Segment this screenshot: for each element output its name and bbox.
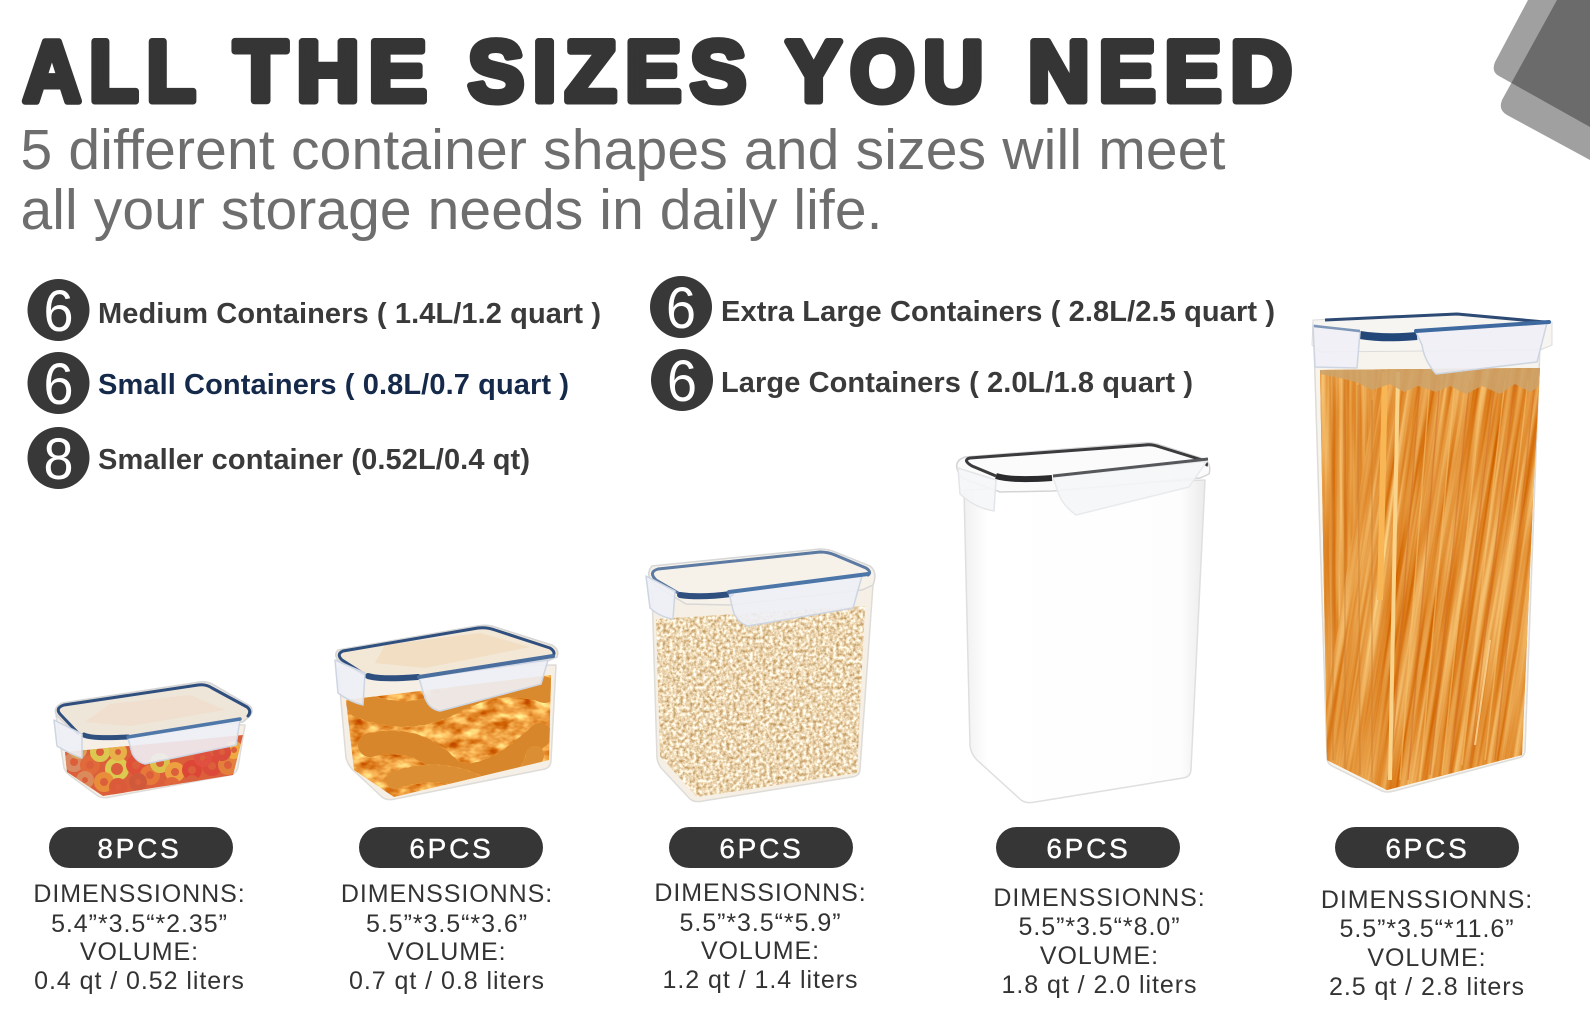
legend item: smaller container: 8	[44, 427, 74, 492]
badge: 6PCS small: 6PCS	[409, 833, 494, 864]
specs: smaller container: 5.4”*3.5“*2.35”	[51, 910, 228, 938]
specs: large container: VOLUME:	[1040, 942, 1159, 970]
badge: 6PCS large: 6PCS	[1046, 833, 1131, 864]
badge: 6PCS extra large: 6PCS	[1385, 833, 1470, 864]
legend item: large containers	[651, 349, 1193, 414]
specs: extra large container: DIMENSSIONNS:	[1321, 886, 1533, 914]
subtitle	[20, 118, 1226, 242]
specs: medium container: DIMENSSIONNS:	[654, 879, 867, 907]
legend item: small containers: 6	[44, 352, 74, 417]
specs: smaller container: 0.4 qt / 0.52 liters	[34, 967, 245, 995]
subtitle: 5 different container shapes and sizes will meet	[20, 118, 1226, 182]
column 5: badge and specs	[1321, 827, 1533, 1001]
subtitle: all your storage needs in daily life.	[20, 178, 882, 242]
container 3: rolled oats	[646, 549, 875, 802]
specs: smaller container	[33, 880, 246, 995]
legend: right column	[650, 276, 1275, 414]
badge: 6PCS small	[359, 827, 543, 868]
column 1: badge and specs	[33, 827, 246, 995]
specs: extra large container: VOLUME:	[1367, 944, 1487, 972]
specs: large container	[993, 884, 1206, 999]
legend item: large containers: Large Containers ( 2.0L/1.8 quart )	[721, 367, 1193, 399]
specs: smaller container: DIMENSSIONNS:	[33, 880, 246, 908]
title: NEED	[1028, 24, 1301, 120]
badge: 6PCS medium: 6PCS	[719, 833, 804, 864]
specs: large container: 1.8 qt / 2.0 liters	[1002, 971, 1197, 999]
column 2: badge and specs	[341, 827, 553, 995]
legend item: extra large containers	[650, 276, 1275, 341]
specs: small container	[341, 880, 553, 995]
specs: large container: 5.5”*3.5“*8.0”	[1018, 913, 1180, 941]
legend item: smaller container	[28, 427, 530, 492]
specs: small container: 0.7 qt / 0.8 liters	[349, 967, 545, 995]
decorative corner shapes	[1494, 0, 1590, 160]
specs: extra large container	[1321, 886, 1533, 1001]
column 4: badge and specs	[993, 827, 1206, 999]
title: ALL	[23, 24, 204, 120]
badge: 6PCS extra large	[1335, 827, 1519, 868]
specs: extra large container: 5.5”*3.5“*11.6”	[1340, 915, 1514, 943]
badge: 8PCS: 8PCS	[97, 833, 182, 864]
specs: medium container: VOLUME:	[701, 937, 820, 965]
container 4: white flour	[957, 443, 1210, 803]
badge: 8PCS	[49, 827, 233, 868]
legend item: medium containers: 6	[44, 279, 74, 344]
legend item: small containers	[28, 352, 569, 417]
specs: medium container: 1.2 qt / 1.4 liters	[663, 966, 858, 994]
title: YOU	[786, 24, 992, 120]
container 5: spaghetti	[1312, 312, 1552, 793]
legend: left column	[28, 279, 601, 492]
badge: 6PCS large	[996, 827, 1180, 868]
container 2: rotini pasta	[335, 625, 558, 800]
title	[23, 24, 1301, 120]
title: SIZES	[468, 24, 755, 120]
title: THE	[234, 24, 436, 120]
specs: medium container	[654, 879, 867, 994]
legend item: medium containers	[28, 279, 601, 344]
legend item: smaller container: Smaller container (0.52L/0.4 qt)	[98, 444, 530, 476]
specs: small container: 5.5”*3.5“*3.6”	[366, 910, 528, 938]
specs: medium container: 5.5”*3.5“*5.9”	[680, 909, 842, 937]
container 1: cereal	[54, 682, 252, 800]
legend item: small containers: Small Containers ( 0.8L/0.7 quart )	[98, 369, 569, 401]
badge: 6PCS medium	[669, 827, 853, 868]
column 3: badge and specs	[654, 827, 867, 994]
legend item: extra large containers: 6	[666, 276, 696, 341]
legend item: large containers: 6	[667, 349, 697, 414]
legend item: extra large containers: Extra Large Containers ( 2.8L/2.5 quart )	[721, 296, 1275, 328]
legend item: medium containers: Medium Containers ( 1.4L/1.2 quart )	[98, 298, 601, 330]
specs: small container: VOLUME:	[387, 938, 507, 966]
specs: small container: DIMENSSIONNS:	[341, 880, 553, 908]
specs: large container: DIMENSSIONNS:	[993, 884, 1206, 912]
specs: smaller container: VOLUME:	[80, 938, 199, 966]
specs: extra large container: 2.5 qt / 2.8 liters	[1329, 973, 1525, 1001]
